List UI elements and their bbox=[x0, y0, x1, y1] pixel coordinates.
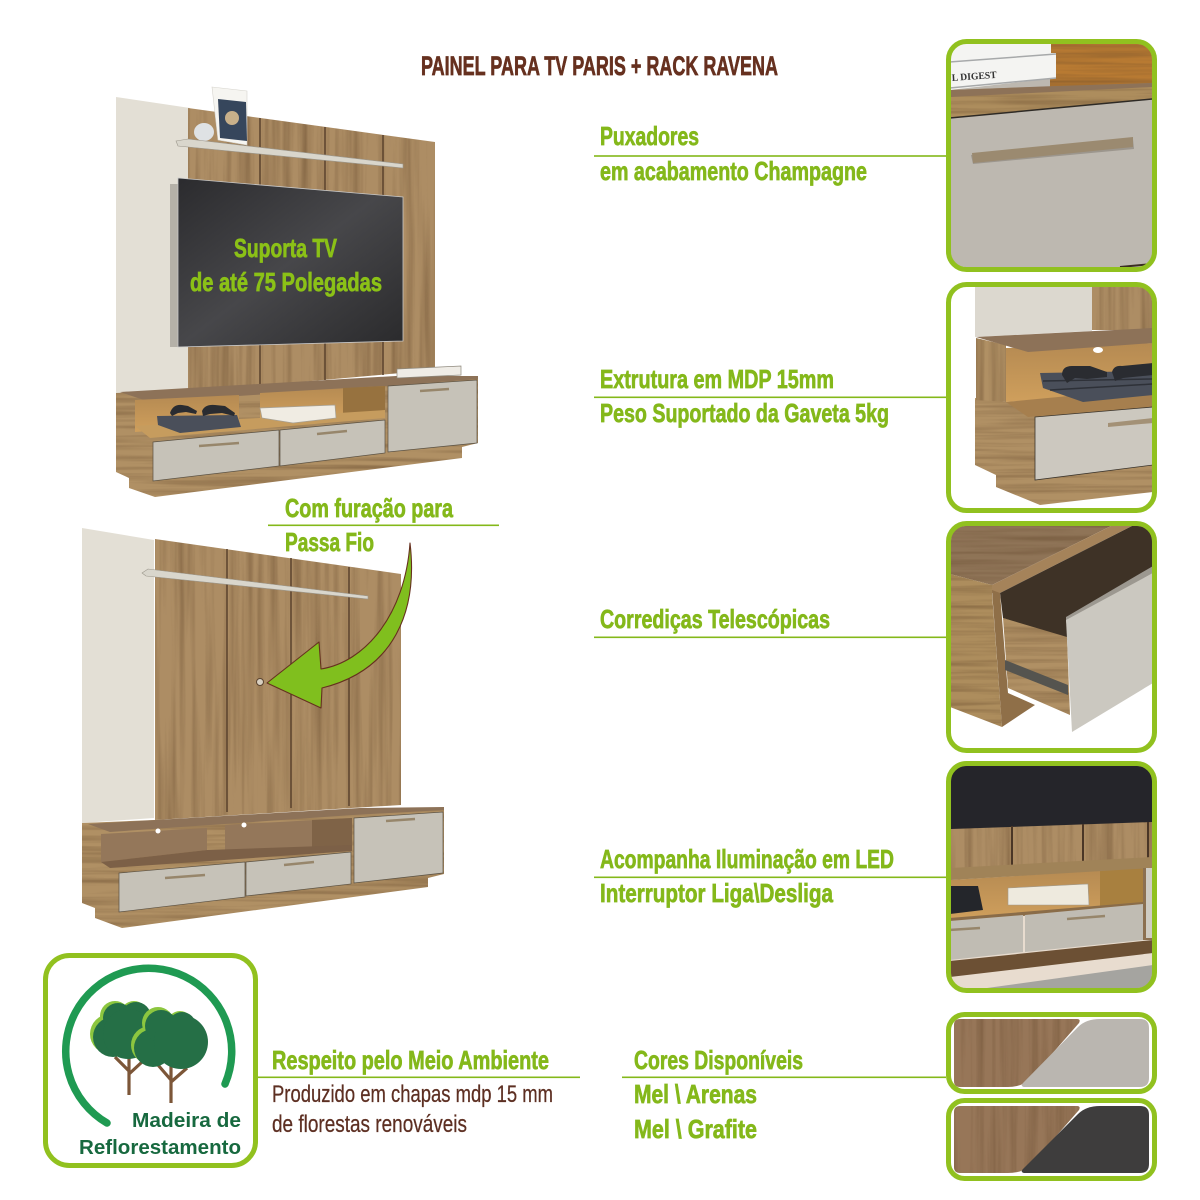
panel: LED lighting detail bbox=[948, 764, 1154, 990]
wall shelf bbox=[142, 569, 368, 599]
TV shadow bbox=[170, 184, 178, 347]
text block: environment: Respeito pelo Meio Ambiente bbox=[272, 1045, 549, 1075]
panel grooves bbox=[260, 118, 383, 385]
color swatch: Mel / Arenas bbox=[948, 1014, 1154, 1092]
text block: handles: Puxadores bbox=[600, 121, 699, 151]
TV screen bbox=[178, 178, 403, 347]
panel: reforestation badge: Reflorestamento bbox=[79, 1137, 241, 1159]
console and controllers bbox=[157, 405, 241, 433]
door right bbox=[354, 812, 443, 883]
text block: slides: Corrediças Telescópicas bbox=[600, 604, 830, 634]
rack top slab bbox=[88, 807, 444, 832]
rack top slab bbox=[120, 376, 478, 402]
caption: cable hole: Com furação para bbox=[285, 493, 453, 523]
panel: reforestation badge bbox=[46, 956, 256, 1166]
panel: telescopic slide detail bbox=[948, 524, 1154, 750]
panel grooves bbox=[227, 549, 349, 812]
text block: handles: em acabamento Champagne bbox=[600, 156, 867, 186]
frame bbox=[948, 42, 1154, 270]
drawer middle bbox=[280, 420, 385, 466]
stack of books bbox=[260, 405, 336, 423]
beige side panel bbox=[82, 528, 154, 823]
panel: handle detail: L DIGEST bbox=[951, 70, 997, 84]
handles bbox=[199, 389, 449, 446]
caption: cable hole: Passa Fio bbox=[285, 527, 374, 557]
drawer middle bbox=[246, 852, 351, 896]
text block: structure: Extrutura em MDP 15mm bbox=[600, 364, 834, 394]
panel: handle detail bbox=[948, 42, 1154, 270]
TV caption: Suporta TV bbox=[234, 233, 337, 263]
text block: LED: Acompanha Iluminação em LED bbox=[600, 844, 894, 874]
rack body bbox=[116, 377, 478, 497]
wall shelf bbox=[176, 139, 403, 168]
product image: panel with TV and rack bbox=[116, 87, 478, 497]
title: PAINEL PARA TV PARIS + RACK RAVENA bbox=[421, 51, 778, 81]
caption: cable hole bbox=[268, 493, 499, 557]
frame bbox=[948, 764, 1154, 990]
text block: LED bbox=[594, 844, 946, 908]
drawer left bbox=[119, 862, 245, 912]
text block: colors bbox=[622, 1045, 946, 1144]
product image: panel rear view with rack bbox=[82, 528, 444, 928]
wood back panel bbox=[188, 108, 435, 392]
wood back panel bbox=[155, 539, 401, 820]
lit niches bbox=[135, 386, 385, 438]
rack body bbox=[82, 808, 444, 928]
door right bbox=[388, 380, 477, 452]
panel: structure detail bbox=[948, 284, 1154, 510]
text block: structure bbox=[594, 364, 946, 428]
books on rack bbox=[397, 366, 461, 378]
color swatch: Mel / Grafite bbox=[948, 1100, 1154, 1178]
cable hole bbox=[256, 678, 264, 686]
drawer left bbox=[153, 430, 279, 481]
icon: trees bbox=[90, 1001, 208, 1103]
text block: environment: de florestas renováveis bbox=[272, 1111, 467, 1138]
text block: colors: Cores Disponíveis bbox=[634, 1045, 803, 1075]
text block: handles bbox=[594, 121, 946, 186]
frame bbox=[948, 524, 1154, 750]
text block: LED: Interruptor Liga\Desliga bbox=[600, 878, 833, 908]
open niches bbox=[101, 818, 352, 868]
arrow to cable hole bbox=[267, 543, 412, 708]
text block: environment bbox=[258, 1045, 580, 1138]
text block: colors: Mel \ Grafite bbox=[634, 1114, 757, 1144]
TV caption: de até 75 Polegadas bbox=[190, 267, 382, 297]
badge text: Madeira de bbox=[132, 1110, 241, 1132]
text block: colors: Mel \ Arenas bbox=[634, 1079, 757, 1109]
text block: environment: Produzido em chapas mdp 15 mm bbox=[272, 1081, 553, 1108]
decor book and vase bbox=[194, 87, 247, 145]
badge frame bbox=[46, 956, 256, 1166]
beige side panel bbox=[116, 97, 190, 393]
text block: structure: Peso Suportado da Gaveta 5kg bbox=[600, 398, 889, 428]
handles bbox=[165, 819, 415, 878]
frame bbox=[948, 284, 1154, 510]
TV caption bbox=[190, 233, 382, 297]
green arc bbox=[66, 968, 232, 1123]
